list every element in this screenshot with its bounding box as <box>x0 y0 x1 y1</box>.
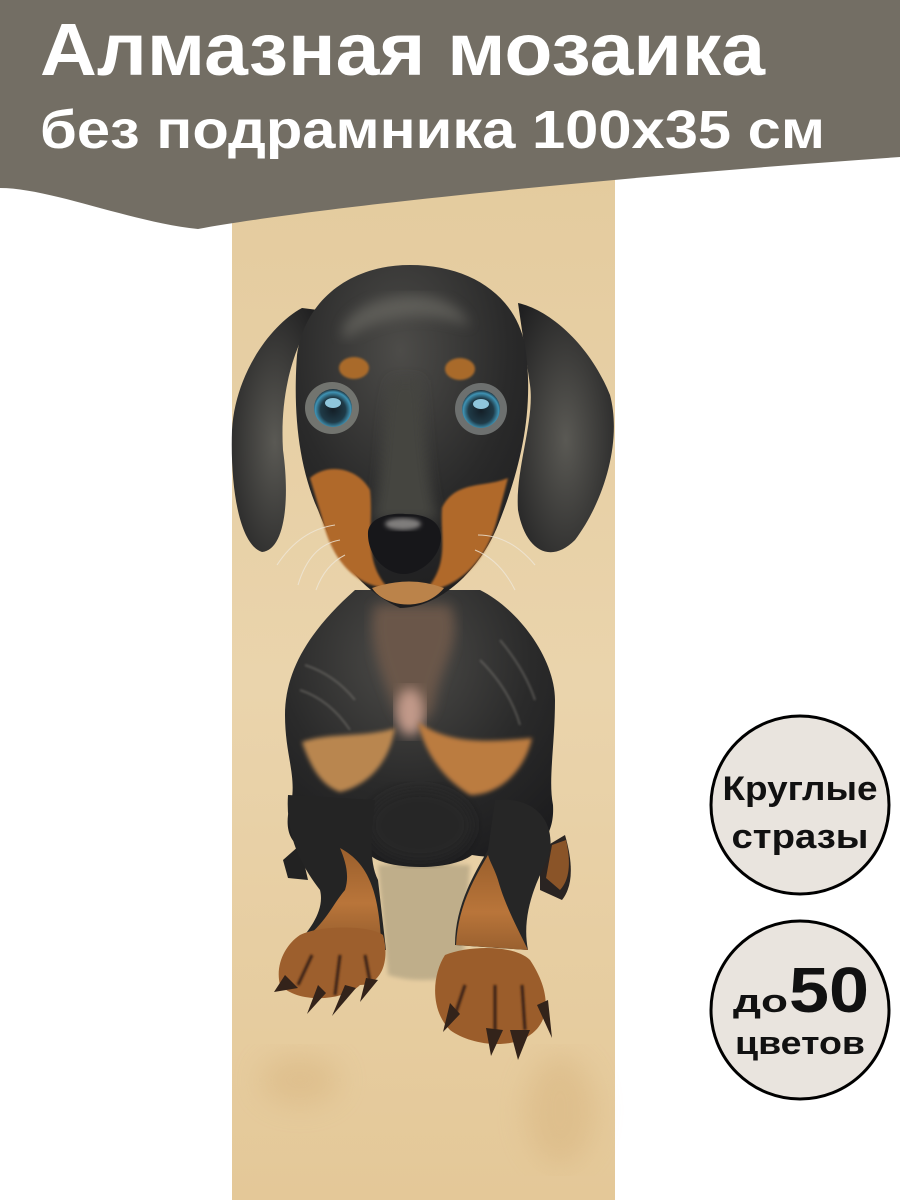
title: Алмазная мозаика <box>40 8 766 91</box>
body <box>285 590 555 867</box>
forehead highlight <box>343 295 470 340</box>
head <box>296 265 528 608</box>
right paw claws and toes <box>443 985 552 1060</box>
header banner <box>0 0 900 229</box>
canvas paper background <box>232 170 615 1200</box>
badge: round rhinestones: Круглые <box>722 770 878 808</box>
paper stains <box>260 1055 595 1165</box>
dachshund puppy <box>232 265 614 1060</box>
left leg <box>288 795 386 950</box>
right paw <box>435 948 546 1044</box>
left paw claws and toes <box>274 955 378 1016</box>
left paw <box>279 928 385 998</box>
belly shading <box>368 789 472 861</box>
right chest tan patch <box>418 722 532 795</box>
badge: up to 50 colours: цветов <box>735 1025 865 1061</box>
left eye <box>305 382 359 434</box>
subtitle: без подрамника 100х35 см <box>40 100 825 160</box>
panel: dachshund puppy picture <box>232 170 615 1200</box>
left muzzle tan <box>310 469 388 588</box>
nose <box>368 514 441 574</box>
badge: round rhinestones: стразы <box>732 818 868 856</box>
chest brown fur <box>372 605 455 724</box>
muzzle stripe <box>372 380 438 520</box>
left chest tan patch <box>302 728 395 792</box>
right ear <box>518 303 614 552</box>
badge: round rhinestones <box>711 716 889 894</box>
badge: up to 50 colours: 50 <box>789 954 869 1026</box>
fur highlights <box>300 640 545 835</box>
chin <box>372 582 444 605</box>
right leg <box>455 800 551 950</box>
right eye <box>455 383 507 435</box>
shadow under the puppy <box>378 865 470 980</box>
back paws <box>540 835 571 900</box>
left ear <box>232 308 318 552</box>
badge: up to 50 colours <box>711 921 889 1099</box>
whiskers <box>277 525 535 590</box>
chest pale highlight <box>396 688 424 736</box>
right muzzle tan <box>424 478 508 592</box>
badge: up to 50 colours: до <box>733 983 788 1019</box>
eyebrow spots <box>339 357 369 379</box>
